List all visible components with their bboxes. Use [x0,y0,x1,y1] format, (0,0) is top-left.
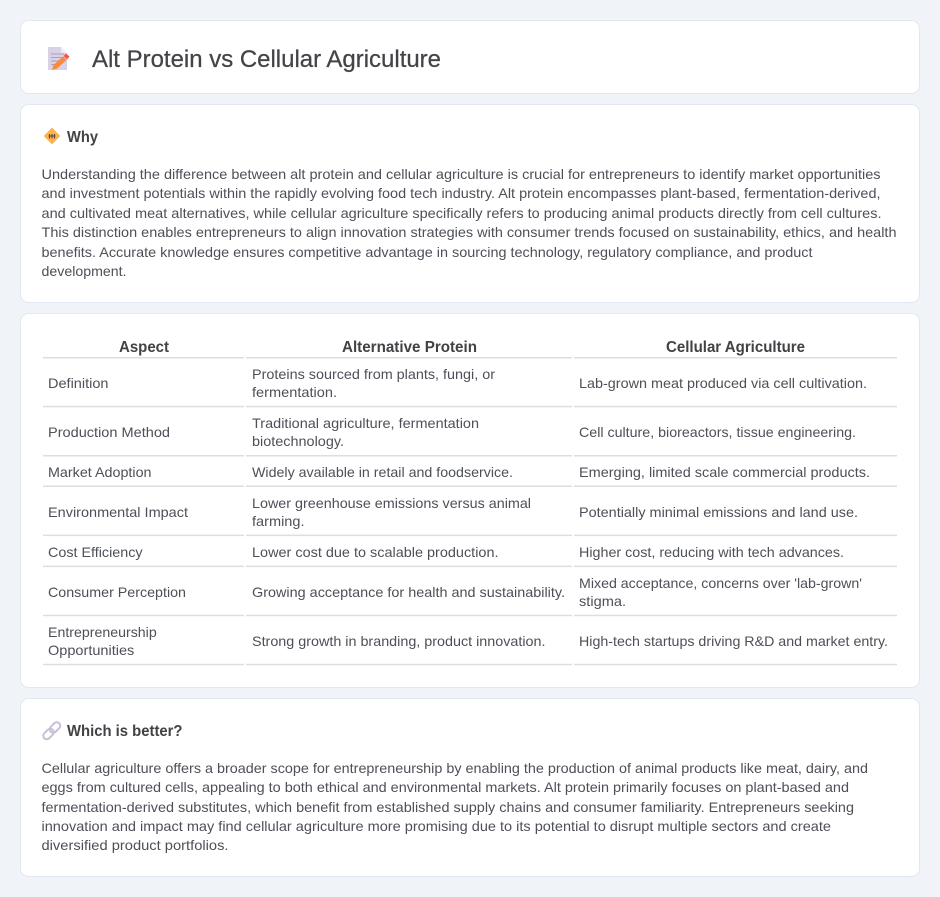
row: consumer perception: Growing acceptance for health and sustainability. [252,584,565,600]
title: Alt Protein vs Cellular Agriculture [92,46,441,73]
row: consumer perception: Mixed acceptance, concerns over 'lab-grown' [579,575,862,591]
panel: comparison table [20,314,920,688]
table header [119,339,805,356]
row: entrepreneurship opportunities [48,624,888,658]
text block: why paragraph: development. [42,263,126,279]
row: market adoption: Emerging, limited scale commercial products. [579,464,870,480]
row: production method [48,415,856,449]
heading: why: Why [67,129,98,146]
row: definition: Proteins sourced from plants, fungi, or [252,366,495,382]
row: production method: Traditional agriculture, fermentation [252,415,479,431]
row: production method: biotechnology. [252,433,344,449]
row: market adoption: Market Adoption [48,464,152,480]
row: consumer perception [48,575,862,609]
row: environmental impact: Potentially minimal emissions and land use. [579,504,858,520]
row: entrepreneurship opportunities: Strong growth in branding, product innovation. [252,633,546,649]
text block: why paragraph [42,166,897,279]
panel: title card [20,20,920,94]
row: cost efficiency: Higher cost, reducing with tech advances. [579,544,844,560]
row: definition: Definition [48,375,108,391]
row: definition [48,366,867,400]
text block: verdict paragraph [42,760,868,853]
row: production method: Production Method [48,424,170,440]
heading: which is better: Which is better? [67,723,182,740]
row: market adoption: Widely available in retail and foodservice. [252,464,513,480]
text block: why paragraph: Understanding the difference between alt protein and cellular agriculture is crucial for entrepreneurs to identify market opportunities [42,166,880,182]
row: market adoption [48,464,870,480]
row: consumer perception: stigma. [579,593,626,609]
panel: why [20,104,920,302]
text block: why paragraph: benefits. Accurate knowledge ensures competitive advantage in sourcing technology, regulatory compliance, and product [42,244,813,260]
row: entrepreneurship opportunities: Entrepreneurship [48,624,157,640]
panel: which is better [20,698,920,876]
row: environmental impact: Environmental Impact [48,504,188,520]
text block: verdict paragraph: eggs from cultured cells, appealing to both ethical and environmental markets. Alt protein primarily focuses on plant-based and [42,779,849,795]
text block: why paragraph: and cultivated meat alternatives, while cellular agriculture specifically refers to producing animal products directly from cell cultures. [42,205,882,221]
row: consumer perception: Consumer Perception [48,584,186,600]
text block: verdict paragraph: diversified product portfolios. [42,837,228,853]
row: environmental impact: Lower greenhouse emissions versus animal [252,495,531,511]
row: production method: Cell culture, bioreactors, tissue engineering. [579,424,856,440]
text block: why paragraph: This distinction enables entrepreneurs to align innovation strategies with consumer trends focused on sustainability, ethics, and health [42,224,897,240]
row: definition: fermentation. [252,384,337,400]
row: cost efficiency: Lower cost due to scalable production. [252,544,498,560]
row: entrepreneurship opportunities: Opportunities [48,642,134,658]
row: cost efficiency: Cost Efficiency [48,544,143,560]
row: environmental impact: farming. [252,513,304,529]
row: definition: Lab-grown meat produced via cell cultivation. [579,375,867,391]
table header: Alternative Protein [342,339,477,356]
text block: verdict paragraph: Cellular agriculture offers a broader scope for entrepreneurship by enabling the production of animal products like meat, dairy, and [42,760,868,776]
row: entrepreneurship opportunities: High-tech startups driving R&D and market entry. [579,633,888,649]
row: environmental impact [48,495,858,529]
text block: why paragraph: and investment potentials within the rapidly evolving food tech industry. Alt protein encompasses plant-based, fermentation-derived, [42,185,880,201]
text block: verdict paragraph: innovation and impact may find cellular agriculture more promising due to its potential to disrupt multiple sectors and create [42,818,831,834]
text block: verdict paragraph: fermentation-derived substitutes, which benefit from established supply chains and consumer familiarity. Entrepreneurs seeking [42,799,854,815]
icon: orange warning diamond [44,128,60,144]
table rules [43,357,897,665]
table header: Cellular Agriculture [666,339,805,356]
table header: Aspect [119,339,170,356]
row: cost efficiency [48,544,844,560]
icon: memo with pencil [48,47,70,70]
icon: link [42,721,62,741]
